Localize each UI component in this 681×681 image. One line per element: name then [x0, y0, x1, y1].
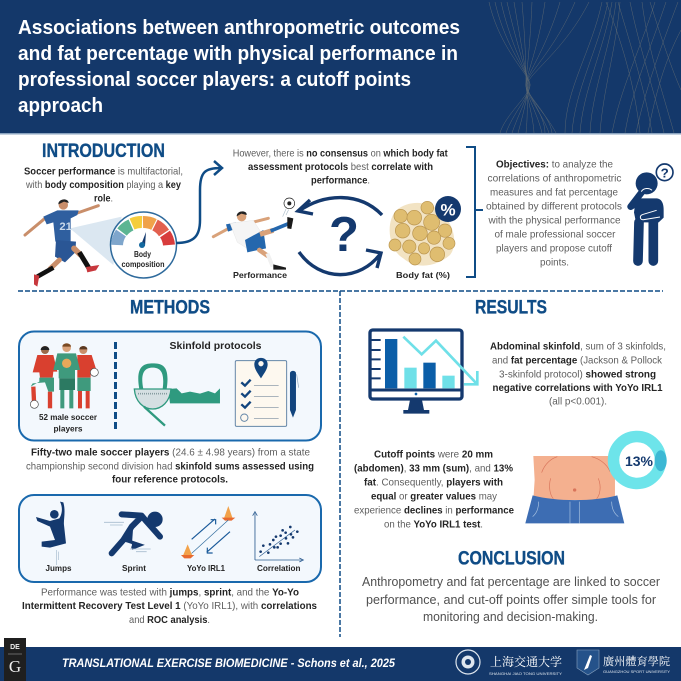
icon: soccer player with jersey 21 — [25, 199, 122, 287]
skinfold description — [26, 446, 314, 486]
introduction text: with body composition playing a key — [25, 179, 181, 191]
results text: correlations: 3-skinfold protocol) showed strong — [499, 368, 656, 380]
results text: correlations — [490, 340, 666, 408]
icon: three soccer players — [30, 343, 98, 408]
logo: Shanghai Jiao Tong University: 上海交通大学 — [490, 653, 562, 670]
performance description: Performance was tested with jumps, sprint, and the Yo-Yo — [41, 586, 299, 598]
icon: kicking player — [213, 198, 295, 270]
panel: participants and skinfold protocols — [19, 332, 321, 440]
title: approach — [18, 94, 103, 117]
skinfold description: four reference protocols. — [112, 474, 228, 486]
icon: abdomen with jeans — [525, 456, 624, 523]
chart: 13 percent donut: 13% — [625, 453, 654, 469]
logo: De Gruyter — [4, 638, 26, 681]
performance description — [22, 586, 317, 626]
results text: correlations: negative correlations with YoYo IRL1 — [492, 382, 663, 394]
badge: percent: % — [440, 200, 456, 220]
conclusion text: performance, and cut-off points offer simple tools for — [366, 593, 656, 607]
heading: results: RESULTS — [475, 298, 547, 318]
icon: thinking person: ? — [661, 165, 669, 180]
objectives text: obtained by different protocols — [486, 200, 622, 212]
logo: Guangzhou Sport University: 廣州體育學院 — [603, 653, 670, 669]
performance description: and ROC analysis. — [129, 614, 210, 626]
consensus text: assessment protocols best correlate with — [248, 161, 433, 173]
title — [18, 16, 460, 117]
performance description: Intermittent Recovery Test Level 1 (YoYo IRL1), with correlations — [22, 600, 317, 612]
arrow: from gauge to question — [176, 161, 222, 243]
introduction text — [24, 166, 183, 204]
results text: cutoff points — [354, 448, 514, 530]
results text: cutoff points: experience declines in performance — [354, 504, 514, 516]
title: and fat percentage with physical performance in — [18, 42, 458, 65]
icon: jumps — [36, 502, 66, 565]
footer bar — [0, 647, 681, 681]
heading: methods: METHODS — [130, 298, 210, 318]
results text: cutoff points: on the YoYo IRL1 test. — [384, 518, 483, 530]
consensus text: performance. — [311, 174, 370, 186]
vertical divider — [339, 291, 341, 637]
objectives text: correlations of anthropometric — [488, 172, 622, 184]
conclusion text: Anthropometry and fat percentage are linked to soccer — [362, 575, 660, 589]
chart: 13 percent donut — [614, 436, 667, 484]
footer citation: TRANSLATIONAL EXERCISE BIOMEDICINE - Schons et al., 2025 — [62, 658, 396, 670]
conclusion text — [362, 575, 660, 624]
icon: skinfold caliper — [134, 363, 220, 426]
skinfold description: championship second division had skinfold sums assessed using — [26, 460, 314, 472]
introduction text: Soccer performance is multifactorial, — [24, 166, 183, 178]
label: 52 male soccer players: 52 male soccer — [39, 412, 98, 422]
logo: De Gruyter: G — [9, 657, 21, 676]
objectives text: points. — [540, 256, 569, 268]
results text: correlations: Abdominal skinfold, sum of 3 skinfolds, — [490, 340, 666, 352]
label: jumps: Jumps — [46, 563, 72, 573]
question mark: ? — [329, 208, 359, 262]
objectives text: Objectives: to analyze the — [496, 158, 613, 170]
logo: Guangzhou Sport University: GUANGZHOU SPORT UNIVERSITY — [603, 670, 670, 674]
bracket — [466, 147, 483, 277]
title: professional soccer players: a cutoff points — [18, 68, 411, 91]
icon: checklist with pin and pen — [235, 358, 299, 426]
results text: cutoff points: Cutoff points were 20 mm — [374, 448, 493, 460]
icon: soccer player with jersey 21: 21 — [59, 221, 72, 233]
panel: performance tests — [19, 495, 321, 582]
results text: correlations: (all p<0.001). — [549, 396, 607, 408]
label: performance: Performance — [233, 270, 287, 280]
subheading: skinfold protocols: Skinfold protocols — [170, 340, 262, 352]
objectives text: with the physical performance — [488, 214, 621, 226]
icon: body composition gauge: composition — [122, 260, 165, 269]
label: correlation: Correlation — [257, 563, 300, 573]
icon: body composition gauge: Body — [134, 250, 152, 259]
badge: percent — [435, 196, 461, 222]
arrows: bidirectional relationship — [298, 198, 382, 275]
heading: conclusion: CONCLUSION — [458, 548, 565, 570]
heading: introduction: INTRODUCTION — [42, 141, 165, 162]
icon: fat cells — [389, 201, 455, 266]
results text: cutoff points: (abdomen), 33 mm (sum), and 13% — [354, 462, 514, 474]
consensus text — [233, 148, 448, 186]
results text: correlations: and fat percentage (Jackson & Pollock — [492, 354, 663, 366]
title: Associations between anthropometric outcomes — [18, 16, 460, 39]
label: sprint: Sprint — [122, 563, 146, 573]
objectives text: measures and fat percentage — [490, 186, 618, 198]
icon: body composition gauge — [110, 212, 176, 278]
objectives text — [486, 158, 622, 268]
objectives text: players and propose cutoff — [496, 242, 612, 254]
horizontal divider — [18, 290, 663, 292]
objectives text: of male professional soccer — [494, 228, 616, 240]
icon: thinking person — [631, 164, 673, 261]
label: 52 male soccer players — [39, 412, 98, 434]
logo: De Gruyter: DE — [10, 644, 20, 651]
conclusion text: monitoring and decision-making. — [423, 610, 598, 624]
label: yoyo irl1: YoYo IRL1 — [187, 563, 225, 573]
results text: cutoff points: equal or greater values may — [371, 490, 498, 502]
logo: Shanghai Jiao Tong University: SHANGHAI JIAO TONG UNIVERSITY — [489, 671, 562, 676]
results text: cutoff points: fat. Consequently, players with — [364, 476, 503, 488]
consensus text: However, there is no consensus on which body fat — [233, 148, 448, 160]
logo: Guangzhou Sport University — [577, 650, 670, 675]
label: body fat: Body fat (%) — [396, 270, 450, 280]
icon: monitor with declining bars — [370, 330, 477, 414]
icon: sprint — [104, 512, 163, 553]
header banner — [0, 0, 681, 134]
skinfold description: Fifty-two male soccer players (24.6 ± 4.98 years) from a state — [31, 446, 310, 458]
icon: yoyo test cones and arrows — [181, 506, 235, 558]
chart: correlation scatter plot — [253, 512, 303, 562]
label: 52 male soccer players: players — [54, 424, 83, 434]
logo: Shanghai Jiao Tong University — [456, 650, 562, 676]
introduction text: role. — [94, 192, 113, 204]
